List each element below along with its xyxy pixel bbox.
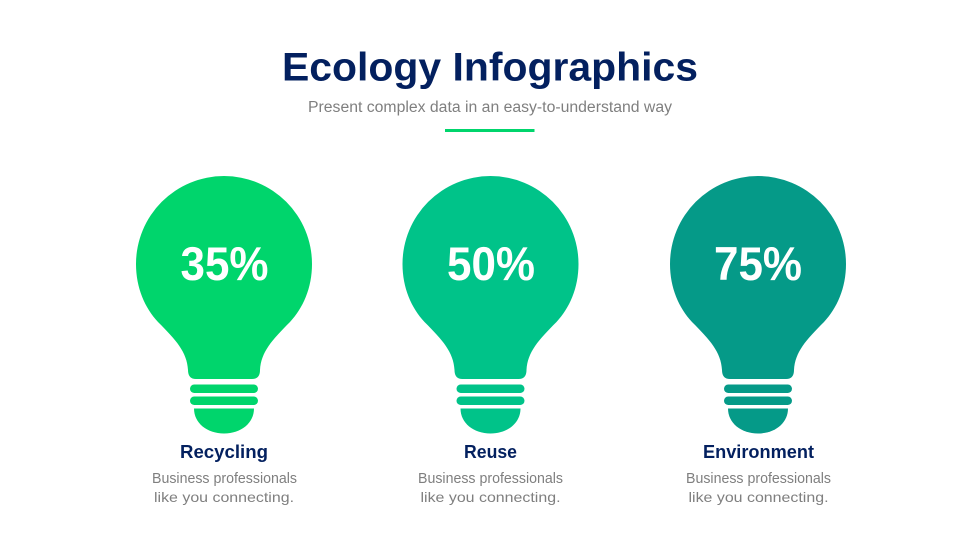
description line 2: Reuse: like you connecting. (420, 489, 560, 505)
percentage: 75%: 75% (714, 237, 802, 290)
percentage: 50%: 50% (447, 237, 535, 290)
description: Environment: Business professionals (686, 470, 831, 487)
title: Ecology Infographics (282, 46, 698, 90)
panel: reuse (402, 176, 578, 487)
percentage: 35%: 35% (180, 237, 268, 290)
icon: light bulb 35% (136, 176, 312, 434)
heading: Recycling: Recycling (180, 441, 268, 462)
heading: Environment: Environment (703, 441, 814, 462)
title accent line (445, 129, 534, 132)
panel: recycling (136, 176, 312, 487)
icon: light bulb 50% (402, 176, 578, 434)
subtitle: Present complex data in an easy-to-understand way (308, 99, 672, 116)
description: Recycling: Business professionals (152, 470, 297, 487)
icon: light bulb 75% (670, 176, 846, 434)
heading: Reuse: Reuse (464, 441, 517, 462)
description: Reuse: Business professionals (418, 470, 563, 487)
description line 2: Recycling: like you connecting. (154, 489, 294, 505)
panel: environment (670, 176, 846, 487)
description line 2: Environment: like you connecting. (688, 489, 828, 505)
